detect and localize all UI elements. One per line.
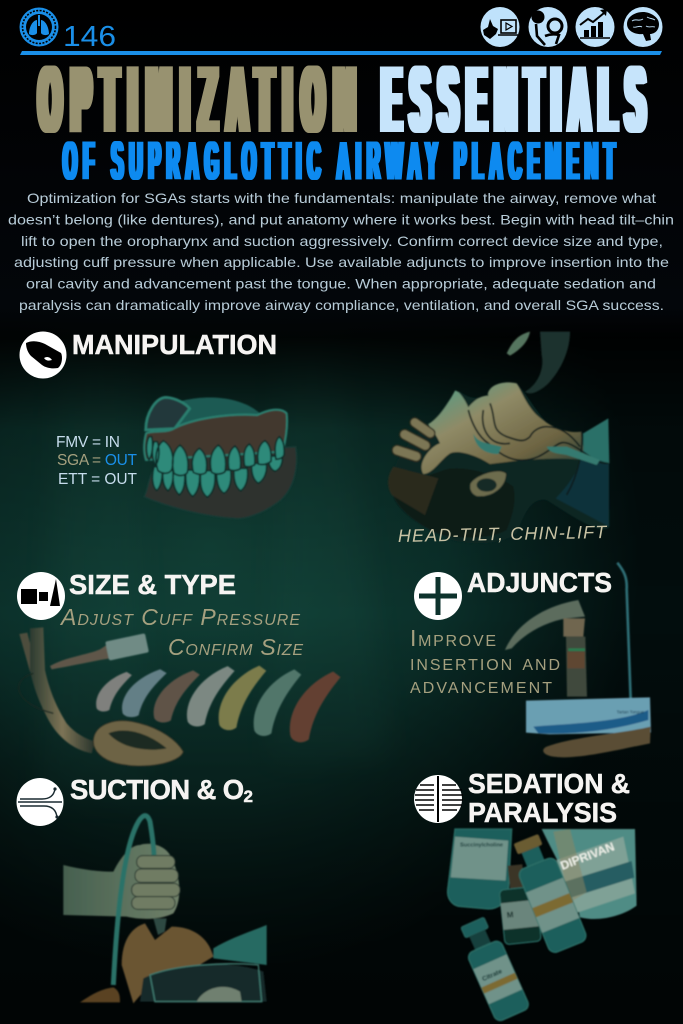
ventilation table: FMV = IN <box>56 434 121 451</box>
heading: sedation: SEDATION & <box>468 768 630 799</box>
intro paragraph: lift to open the oropharynx and suction aggressively. Confirm correct device size and type, <box>21 234 663 249</box>
intro paragraph: oral cavity and advancement past the tongue. When appropriate, adequate sedation and <box>26 276 656 292</box>
illustration: suction catheter in hand <box>63 816 267 1003</box>
title: essentials: ESSENTIALS <box>382 46 645 152</box>
vial: propofol diprivan <box>542 829 637 919</box>
vial: propofol diprivan: DIPRIVAN <box>558 839 616 873</box>
icon: hand <box>20 332 66 378</box>
logo: lungs badge <box>20 8 58 46</box>
intro paragraph: adjusting cuff pressure when applicable. Use available adjuncts to improve insertion into the <box>14 255 669 270</box>
icon: plus <box>414 572 462 620</box>
intro paragraph <box>8 191 674 313</box>
vial: succinylcholine: Succinylcholine <box>460 843 503 849</box>
illustration: medication vials <box>448 829 637 1023</box>
title: optimization: OPTIMIZATION <box>39 46 355 152</box>
vial: succinylcholine <box>448 829 512 909</box>
label: improve insertion and advancement <box>410 625 560 698</box>
illustration: head tilt chin lift <box>388 332 609 543</box>
illustration: laryngoscope, stylet, airway and tongue depressor: Tartan Tongue <box>617 709 645 714</box>
illustration: laryngeal mask airway and sizes <box>19 627 341 766</box>
icon: airflow arrows <box>16 778 64 826</box>
illustration: laryngoscope, stylet, airway and tongue depressor <box>505 563 651 757</box>
ventilation table <box>56 434 138 488</box>
label: improve insertion and advancement: insertion and <box>410 649 560 675</box>
episode number: 146 <box>63 21 116 53</box>
vial: citrate: Citrate <box>481 968 504 983</box>
illustration: dentures <box>144 397 297 519</box>
heading: suction and o2: 2 <box>244 787 253 806</box>
vial: citrate <box>456 915 530 1023</box>
heading: size and type: SIZE & TYPE <box>69 569 236 600</box>
label: improve insertion and advancement: advancement <box>410 672 552 698</box>
subtitle: OF SUPRAGLOTTIC AIRWAY PLACEMENT <box>63 130 615 192</box>
label: improve insertion and advancement: Improve <box>410 625 496 651</box>
intro paragraph: paralysis can dramatically improve airway compliance, ventilation, and overall SGA success. <box>19 298 664 313</box>
vial: clear vial <box>507 831 588 954</box>
laryngeal mask airway <box>19 627 183 766</box>
vial: midazolam <box>497 863 541 945</box>
header rule <box>20 51 662 55</box>
icon: shapes <box>17 572 65 620</box>
ventilation table: ETT = OUT <box>58 471 138 488</box>
row: sga out: SGA = OUT <box>57 452 138 469</box>
heading: manipulation: MANIPULATION <box>72 329 277 360</box>
icon: neuromuscular fibers <box>414 775 463 823</box>
top icons <box>480 7 662 47</box>
label: confirm size: Confirm Size <box>168 634 303 660</box>
supraglottic airway sizes <box>96 666 341 742</box>
panel: manipulation <box>20 329 609 546</box>
caption: head tilt chin lift: HEAD-TILT, CHIN-LIFT <box>398 522 608 546</box>
intro paragraph: Optimization for SGAs starts with the fundamentals: manipulate the airway, remove what <box>27 191 656 206</box>
heading: paralysis: PARALYSIS <box>468 797 617 828</box>
icon: brain <box>624 7 662 47</box>
icon: video lecture <box>480 7 520 47</box>
label: adjust cuff pressure: Adjust Cuff Pressure <box>59 604 300 630</box>
heading: suction and o2: SUCTION & O <box>70 774 244 805</box>
title <box>39 46 645 152</box>
vial: midazolam: M <box>506 910 514 920</box>
panel: size and type <box>17 569 341 766</box>
heading: adjuncts: ADJUNCTS <box>467 567 612 598</box>
panel: suction and oxygen <box>16 774 267 1003</box>
icon: growth chart <box>576 7 614 47</box>
intro paragraph: doesn’t belong (like dentures), and put anatomy where it works best. Begin with head tilt–chin <box>8 212 674 228</box>
panel: adjuncts <box>410 563 651 757</box>
panel: sedation and paralysis <box>414 768 637 1023</box>
icon: person with brain <box>528 7 568 47</box>
